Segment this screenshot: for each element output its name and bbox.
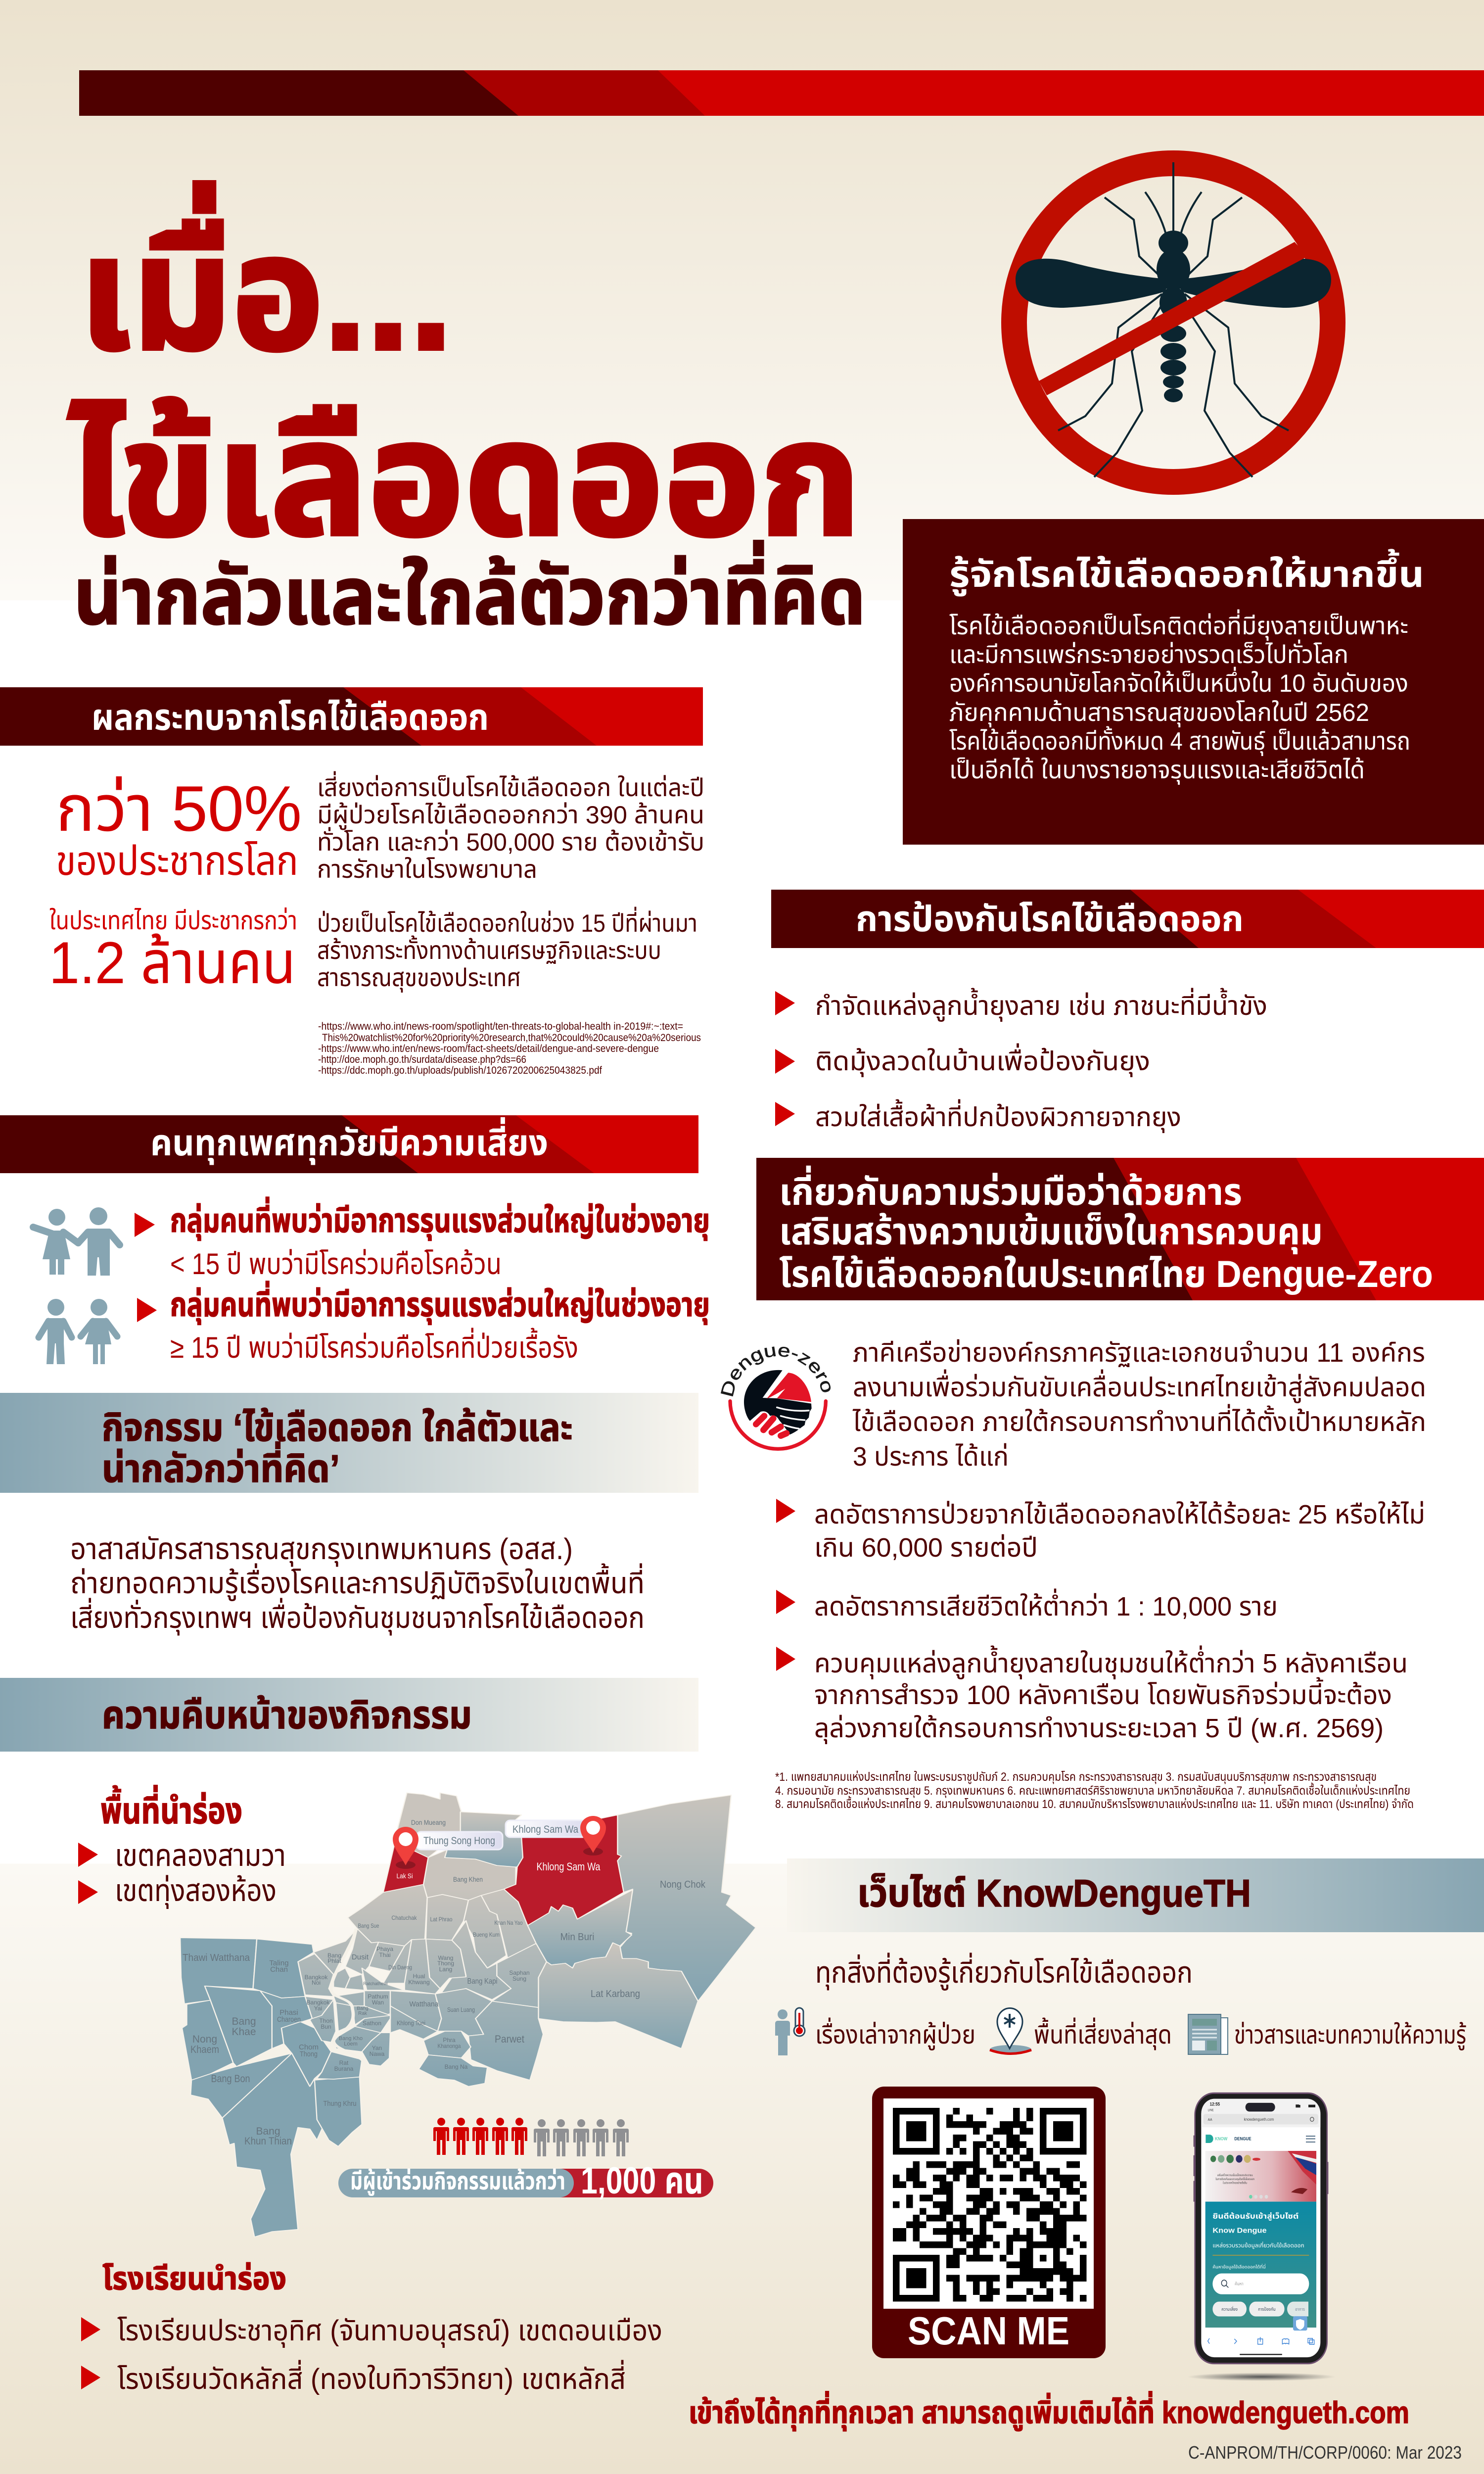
map labels: Loem bbox=[344, 2041, 358, 2047]
map labels: Sung bbox=[512, 1975, 526, 1982]
header: progress bbox=[0, 1678, 698, 1752]
map labels: Hual bbox=[413, 1973, 425, 1980]
map labels: Chan bbox=[270, 1965, 288, 1974]
phone mockup: ยินดีต้อนรับเข้าสู่เว็บไซต์ bbox=[1212, 2212, 1298, 2221]
header: prevention bbox=[771, 890, 1484, 948]
map labels bbox=[183, 1818, 706, 2147]
map labels: Lak Si bbox=[397, 1872, 413, 1880]
map labels: Bang Sue bbox=[358, 1922, 379, 1929]
arrow bullet bbox=[137, 1298, 157, 1322]
participants pill bbox=[338, 2160, 713, 2202]
icon: adults bbox=[39, 1299, 117, 1364]
map labels: Khun Thian bbox=[244, 2136, 292, 2147]
participants pill: มีผู้เข้าร่วมกิจกรรมแล้วกว่า bbox=[350, 2167, 565, 2196]
phone mockup: knowdengueth.com bbox=[1244, 2117, 1274, 2122]
body text: เป็นอีกได้ ในบางรายอาจรุนแรงและเสียชีวิตได้ bbox=[949, 756, 1365, 785]
header: impact: ผลกระทบจากโรคไข้เลือดออก bbox=[92, 697, 489, 738]
pictogram row bbox=[433, 2118, 629, 2156]
phone mockup: แหล่งรวบรวมข้อมูลเกี่ยวกับไข้เลือดออก bbox=[1212, 2241, 1304, 2249]
risk group 1: < 15 ปี พบว่ามีโรคร่วมคือโรคอ้วน bbox=[170, 1247, 502, 1281]
stat: 1.2 million: 1.2 ล้านคน bbox=[49, 930, 296, 996]
text: impact Thailand: ป่วยเป็นโรคไข้เลือดออกในช่วง 15 ปีที่ผ่านมา bbox=[317, 906, 697, 937]
map labels: Thai bbox=[379, 1951, 391, 1958]
body text: ภัยคุกคามด้านสาธารณสุขของโลกในปี 2562 bbox=[949, 699, 1369, 727]
references: This%20watchlist%20for%20priority%20research,that%20could%20cause%20a%20serious bbox=[322, 1032, 701, 1044]
map labels: Wang bbox=[438, 1954, 453, 1961]
map labels: Thong bbox=[300, 2050, 318, 2058]
activity description bbox=[70, 1532, 645, 1636]
stat: 1.2 million: ในประเทศไทย มีประชากรกว่า bbox=[49, 906, 297, 935]
map labels: Thong bbox=[437, 1960, 454, 1967]
logo: Dengue-Zero bbox=[720, 1346, 831, 1451]
phone mockup bbox=[1187, 2093, 1336, 2381]
footnote: 4. กรมอนามัย กระทรวงสาธารณสุข 5. กรุงเทพมหานคร 6. คณะแพทยศาสตร์ศิริราชพยาบาล มหาวิทยาลัยมหิดล 7. สมาคมโรคติดเชื้อในเด็กแห่งประเทศไทย bbox=[775, 1782, 1410, 1798]
map labels: Phasi bbox=[279, 2008, 298, 2017]
map labels: Bang bbox=[256, 2126, 280, 2137]
map labels: Charoen bbox=[277, 2015, 301, 2024]
header: Dengue-Zero: เกี่ยวกับความร่วมมือว่าด้วยการ bbox=[779, 1166, 1242, 1213]
header: website: เว็บไซต์ KnowDengueTH bbox=[857, 1871, 1251, 1915]
pilot schools: โรงเรียนวัดหลักสี่ (ทองใบทิวารีวิทยา) เขตหลักสี่ bbox=[117, 2360, 626, 2395]
map labels: Pathum bbox=[368, 1993, 388, 2000]
header: activity bbox=[0, 1393, 698, 1493]
footnote bbox=[775, 1770, 1414, 1811]
map labels: Chom bbox=[299, 2043, 319, 2051]
icon: patient with thermometer bbox=[775, 2008, 805, 2055]
phone mockup: DENGUE bbox=[1234, 2136, 1252, 2141]
map labels: Bangkok bbox=[305, 1974, 328, 1981]
header: Dengue-Zero: เสริมสร้างความเข้มแข็งในการควบคุม bbox=[779, 1211, 1323, 1254]
map labels: Sathon bbox=[363, 2020, 381, 2027]
map labels: Bang bbox=[232, 2016, 256, 2027]
stat: over 50% bbox=[56, 772, 302, 884]
map labels: Lang bbox=[439, 1966, 452, 1973]
map labels: Rak bbox=[358, 2011, 368, 2016]
pin: Khlong Sam Wa bbox=[580, 1816, 606, 1856]
prevention list: สวมใส่เสื้อผ้าที่ปกป้องผิวกายจากยุง bbox=[815, 1099, 1181, 1133]
label: latest risk areas: พื้นที่เสี่ยงล่าสุด bbox=[1034, 2017, 1172, 2050]
phone mockup: อาการ bbox=[1295, 2306, 1305, 2312]
title bbox=[68, 181, 866, 641]
phone mockup: ค้นหาข้อมูลไข้เลือดออกได้ที่นี่ bbox=[1212, 2264, 1266, 2270]
map labels: Bang Khen bbox=[453, 1875, 483, 1883]
tag: Khlong Sam Wa: Khlong Sam Wa bbox=[512, 1824, 578, 1835]
logo: Dengue-Zero: Dengue-zero bbox=[720, 1346, 831, 1396]
phone mockup: AA bbox=[1208, 2118, 1212, 2122]
header: progress: ความคืบหน้าของกิจกรรม bbox=[102, 1693, 472, 1737]
map labels: Bang bbox=[327, 1952, 341, 1959]
map labels: Lat Phrao bbox=[430, 1916, 453, 1923]
text: impact Thailand: สร้างภาระทั้งทางด้านเศรษฐกิจและระบบ bbox=[317, 935, 661, 964]
map labels: Dusit bbox=[352, 1953, 369, 1961]
map labels: Rat bbox=[339, 2059, 349, 2066]
map labels: Bang bbox=[357, 2006, 369, 2011]
map labels: Burana bbox=[334, 2065, 354, 2072]
references bbox=[318, 1021, 701, 1076]
pilot areas: เขตทุ่งสองห้อง bbox=[115, 1874, 277, 1909]
Dengue-Zero paragraph bbox=[852, 1338, 1426, 1472]
map labels: Khwang bbox=[408, 1979, 430, 1986]
text: impact worldwide: เสี่ยงต่อการเป็นโรคไข้เลือดออก ในแต่ละปี bbox=[317, 771, 704, 802]
phone mockup: LINE bbox=[1208, 2109, 1214, 2112]
text: impact Thailand bbox=[317, 906, 697, 993]
pilot areas bbox=[78, 1785, 286, 1909]
text: impact Thailand: สาธารณสุขของประเทศ bbox=[317, 964, 521, 993]
map labels: Taling bbox=[269, 1959, 289, 1967]
map labels: Wan bbox=[372, 1999, 384, 2006]
header: everyone at risk: คนทุกเพศทุกวัยมีความเสี่ยง bbox=[150, 1117, 548, 1165]
Dengue-Zero paragraph: ภาคีเครือข่ายองค์กรภาครัฐและเอกชนจำนวน 11 องค์กร bbox=[853, 1338, 1425, 1368]
title line 2: ไข้เลือดออก bbox=[68, 389, 861, 569]
map labels: Parwet bbox=[495, 2034, 524, 2045]
icon: risk area pin bbox=[990, 2008, 1031, 2054]
map labels: Don Mueang bbox=[411, 1818, 446, 1826]
map labels: Saphan bbox=[509, 1969, 530, 1976]
map labels: Bang Na bbox=[445, 2063, 468, 2070]
phone mockup: ในประเทศไทยอย่างยั่งยืน bbox=[1223, 2181, 1247, 2185]
phone mockup: ค้นหา bbox=[1235, 2281, 1244, 2286]
header: prevention: การป้องกันโรคไข้เลือดออก bbox=[856, 900, 1244, 939]
map labels: Phra bbox=[443, 2037, 456, 2044]
header: activity: กิจกรรม ‘ไข้เลือดออก ใกล้ตัวและ bbox=[102, 1406, 573, 1449]
map labels: Din Daeng bbox=[388, 1964, 412, 1971]
map labels: Phlat bbox=[327, 1957, 341, 1964]
tag: Khlong Sam Wa bbox=[506, 1820, 587, 1837]
icon: newspaper bbox=[1188, 2014, 1228, 2054]
pilot areas: พื้นที่นำร่อง bbox=[100, 1785, 242, 1831]
risk group 1 bbox=[170, 1197, 710, 1281]
references: -https://ddc.moph.go.th/uploads/publish/1026720200625043825.pdf bbox=[318, 1065, 602, 1076]
text: impact worldwide: มีผู้ป่วยโรคไข้เลือดออกกว่า 390 ล้านคน bbox=[317, 801, 704, 830]
prevention list bbox=[775, 988, 1267, 1133]
participants pill: 1,000 คน bbox=[581, 2160, 703, 2202]
map labels: Min Buri bbox=[560, 1932, 595, 1943]
Dengue-Zero paragraph: ลงนามเพื่อร่วมกันขับเคลื่อนประเทศไทยเข้าสู่สังคมปลอด bbox=[853, 1369, 1426, 1403]
map labels: Noi bbox=[312, 1979, 321, 1986]
map labels: Thawi Watthana bbox=[183, 1952, 250, 1963]
map labels: Nong bbox=[192, 2034, 217, 2045]
header: everyone at risk bbox=[0, 1115, 698, 1173]
map labels: Chatuchak bbox=[392, 1914, 417, 1921]
map labels: Bueng Kum bbox=[473, 1931, 500, 1938]
targets list: ลุล่วงภายใต้กรอบการทำงานระยะเวลา 5 ปี (พ.ศ. 2569) bbox=[814, 1713, 1384, 1744]
map labels: Lat Karbang bbox=[591, 1989, 640, 1999]
phone mockup: ในการป้องกันและควบคุมโรคไข้เลือดออก bbox=[1215, 2178, 1254, 2181]
SCAN ME label: SCAN ME bbox=[908, 2309, 1069, 2353]
map labels: Khae bbox=[232, 2026, 256, 2038]
header: Dengue-Zero: โรคไข้เลือดออกในประเทศไทย Dengue-Zero bbox=[779, 1253, 1433, 1295]
header: website bbox=[787, 1858, 1484, 1932]
icon: no-mosquito sign bbox=[1014, 162, 1333, 482]
map labels: Bang Kho bbox=[339, 2036, 363, 2042]
targets list: ลดอัตราการป่วยจากไข้เลือดออกลงให้ได้ร้อยละ 25 หรือให้ไม่ bbox=[814, 1500, 1425, 1529]
activity description: ถ่ายทอดความรู้เรื่องโรคและการปฏิบัติจริงในเขตพื้นที่ bbox=[70, 1563, 645, 1601]
map labels: Khlong Sam Wa bbox=[536, 1860, 601, 1873]
header: Dengue-Zero bbox=[756, 1158, 1484, 1300]
pilot schools: โรงเรียนประชาอุทิศ (จันทาบอนุสรณ์) เขตดอนเมือง bbox=[117, 2315, 662, 2348]
text: impact worldwide bbox=[317, 771, 704, 883]
stat: over 50%: กว่า 50% bbox=[56, 772, 302, 845]
body text: โรคไข้เลือดออกเป็นโรคติดต่อที่มียุงลายเป็นพาหะ bbox=[949, 609, 1408, 641]
header: activity: น่ากลัวกว่าที่คิด’ bbox=[102, 1442, 340, 1490]
header: impact bbox=[0, 687, 703, 746]
tag: Thung Song Hong bbox=[417, 1832, 503, 1850]
activity description: เสี่ยงทั่วกรุงเทพฯ เพื่อป้องกันชุมชนจากโรคไข้เลือดออก bbox=[70, 1598, 645, 1636]
body text: โรคไข้เลือดออกมีทั้งหมด 4 สายพันธุ์ เป็นแล้วสามารถ bbox=[949, 726, 1410, 756]
pin: Lak Si bbox=[393, 1827, 418, 1869]
body text: องค์การอนามัยโลกจัดให้เป็นหนึ่งใน 10 อันดับของ bbox=[949, 666, 1408, 697]
map labels: Bang Bon bbox=[211, 2073, 250, 2085]
top banner bar bbox=[79, 70, 1484, 116]
map labels: Khan Na Yao bbox=[495, 1919, 523, 1926]
phone mockup: Know Dengue bbox=[1212, 2227, 1267, 2235]
tag: Thung Song Hong: Thung Song Hong bbox=[423, 1835, 495, 1847]
phone mockup: เสริมสร้างความเข้มแข็งของประชาชน bbox=[1217, 2174, 1253, 2177]
phone mockup: ความเสี่ยง bbox=[1221, 2306, 1238, 2312]
pilot schools: โรงเรียนนำร่อง bbox=[102, 2261, 286, 2296]
map labels: Khanonga bbox=[437, 2043, 461, 2049]
map labels: Nong Chok bbox=[660, 1879, 706, 1890]
references: -https://www.who.int/en/news-room/fact-sheets/detail/dengue-and-severe-dengue bbox=[318, 1043, 659, 1054]
risk group 2 bbox=[170, 1281, 710, 1364]
targets list bbox=[776, 1499, 1425, 1744]
map labels: Bun bbox=[321, 2023, 331, 2030]
map labels: Watthana bbox=[410, 2000, 439, 2008]
risk group 2: กลุ่มคนที่พบว่ามีอาการรุนแรงส่วนใหญ่ในช่วงอายุ bbox=[170, 1281, 710, 1325]
risk group 1: กลุ่มคนที่พบว่ามีอาการรุนแรงส่วนใหญ่ในช่วงอายุ bbox=[170, 1197, 710, 1241]
title line 3: น่ากลัวและใกล้ตัวกว่าที่คิด bbox=[74, 540, 866, 641]
footnote: *1. แพทยสมาคมแห่งประเทศไทย ในพระบรมราชูปถัมภ์ 2. กรมควบคุมโรค กระทรวงสาธารณสุข 3. กรมสนับสนุนบริการสุขภาพ กระทรวงสาธารณสุข bbox=[775, 1770, 1377, 1784]
heading: รู้จักโรคไข้เลือดออกให้มากขึ้น bbox=[949, 549, 1424, 597]
arrow bullet bbox=[135, 1213, 155, 1237]
text: impact worldwide: การรักษาในโรงพยาบาล bbox=[317, 856, 537, 883]
text: impact worldwide: ทั่วโลก และกว่า 500,000 ราย ต้องเข้ารับ bbox=[317, 827, 704, 856]
map labels: Phaya bbox=[376, 1946, 393, 1952]
label: patient stories: เรื่องเล่าจากผู้ป่วย bbox=[815, 2017, 975, 2050]
map labels: Thon bbox=[319, 2017, 333, 2024]
activity description: อาสาสมัครสาธารณสุขกรุงเทพมหานคร (อสส.) bbox=[70, 1532, 573, 1567]
body text: และมีการแพร่กระจายอย่างรวดเร็วไปทั่วโลก bbox=[949, 639, 1348, 668]
phone mockup: KNOW bbox=[1215, 2136, 1228, 2141]
map labels: Yai bbox=[314, 2005, 322, 2012]
map labels: Khlong Toei bbox=[397, 2019, 425, 2027]
map labels: Khaem bbox=[190, 2044, 219, 2055]
prevention list: กำจัดแหล่งลูกน้ำยุงลาย เช่น ภาชนะที่มีน้ำขัง bbox=[815, 988, 1267, 1022]
targets list: ลดอัตราการเสียชีวิตให้ต่ำกว่า 1 : 10,000 ราย bbox=[814, 1588, 1278, 1621]
stat: over 50%: ของประชากรโลก bbox=[56, 839, 298, 884]
phone mockup: การป้องกัน bbox=[1258, 2306, 1276, 2312]
map labels: Bang Kapi bbox=[467, 1977, 498, 1986]
targets list: จากการสำรวจ 100 หลังคาเรือน โดยพันธกิจร่วมนี้จะต้อง bbox=[814, 1677, 1392, 1710]
map labels: Bangkok bbox=[307, 1999, 330, 2006]
icon: children bbox=[33, 1207, 120, 1276]
references: -https://www.who.int/news-room/spotlight/ten-threats-to-global-health in-2019#:~:text= bbox=[318, 1021, 683, 1032]
QR code card bbox=[872, 2087, 1106, 2358]
pilot schools bbox=[81, 2261, 662, 2395]
phone mockup: 12:55 bbox=[1210, 2101, 1220, 2107]
map labels: Thung Khru bbox=[324, 2099, 356, 2108]
prevention list: ติดมุ้งลวดในบ้านเพื่อป้องกันยุง bbox=[815, 1043, 1150, 1077]
QR code bbox=[893, 2111, 1086, 2298]
body text bbox=[949, 609, 1410, 785]
map labels: Nawa bbox=[370, 2050, 385, 2057]
risk group 2: ≥ 15 ปี พบว่ามีโรคร่วมคือโรคที่ป่วยเรื้อรัง bbox=[170, 1328, 578, 1364]
pilot areas: เขตคลองสามวา bbox=[115, 1839, 286, 1873]
website intro: ทุกสิ่งที่ต้องรู้เกี่ยวกับโรคไข้เลือดออก bbox=[815, 1952, 1193, 1991]
title line 1: เมื่อ... bbox=[79, 181, 453, 383]
map labels: Suan Luang bbox=[447, 2006, 475, 2013]
map labels: Yan bbox=[372, 2045, 382, 2051]
references: -http://doe.moph.go.th/surdata/disease.php?ds=66 bbox=[318, 1054, 526, 1065]
map of Bangkok bbox=[180, 1793, 756, 2237]
panel: about dengue bbox=[903, 519, 1484, 845]
Dengue-Zero paragraph: ไข้เลือดออก ภายใต้กรอบการทำงานที่ได้ตั้งเป้าหมายหลัก bbox=[852, 1404, 1426, 1437]
targets list: ควบคุมแหล่งลูกน้ำยุงลายในชุมชนให้ต่ำกว่า 5 หลังคาเรือน bbox=[814, 1645, 1408, 1679]
Dengue-Zero paragraph: 3 ประการ ได้แก่ bbox=[853, 1442, 1009, 1472]
targets list: เกิน 60,000 รายต่อปี bbox=[814, 1533, 1038, 1563]
map labels: Ratchathewi bbox=[363, 1981, 388, 1986]
